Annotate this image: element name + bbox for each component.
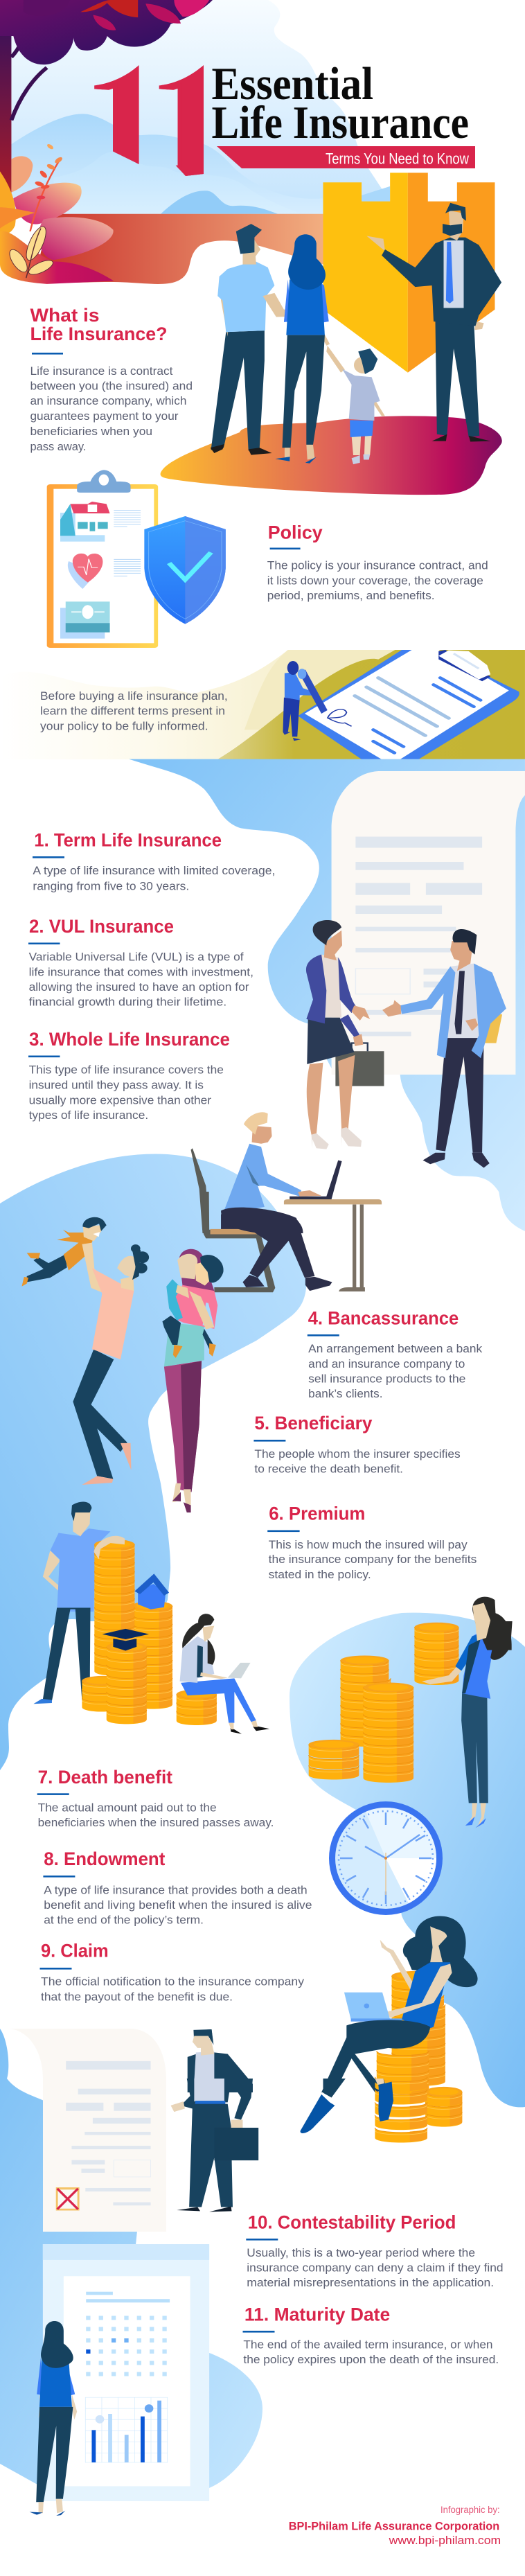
icon: heart [68, 554, 141, 589]
standing woman head [472, 1597, 512, 1650]
illustration: gradient hill [161, 416, 502, 495]
term 8: at the end of the policy’s term. [44, 1914, 204, 1927]
term 1: 1. Term Life Insurance [34, 829, 222, 850]
standing woman body [422, 1621, 513, 1828]
upper body and desk top [191, 1112, 382, 1233]
man legs and coin stacks [33, 1540, 269, 1734]
term 2: 2. VUL Insurance [29, 916, 174, 937]
text: what is life insurance: beneficiaries when you [30, 425, 152, 438]
term 9: that the payout of the benefit is due. [41, 1991, 233, 2003]
footer credits [289, 2504, 501, 2547]
term 9: 9. Claim [41, 1940, 109, 1961]
term 3: This type of life insurance covers the [29, 1064, 224, 1077]
illustration: businessman with briefcase [171, 2029, 258, 2212]
term 9: The official notification to the insurance company [41, 1976, 305, 1988]
illustration: family and insurance agent [211, 203, 501, 464]
title [94, 65, 475, 176]
lower part [301, 2077, 462, 2142]
illustration: document background [332, 771, 525, 1075]
illustration: claim document [10, 2029, 166, 2232]
term 7: beneficiaries when the insured passes away. [38, 1817, 274, 1829]
band background [0, 650, 525, 759]
term 11: 11. Maturity Date [244, 2304, 390, 2324]
term 4: bank’s clients. [308, 1388, 382, 1400]
subtitle ribbon [217, 146, 475, 168]
term 9 [40, 1940, 305, 2003]
legs, chair and desk legs [204, 1192, 365, 1292]
term 1: ranging from five to 30 years. [33, 880, 189, 892]
illustration: lower-left blue blob [0, 2029, 262, 2488]
term 4 [308, 1308, 483, 1400]
term 10: insurance company can deny a claim if they find [247, 2261, 504, 2274]
footer credits: BPI-Philam Life Assurance Corporation [289, 2521, 499, 2533]
term 2: financial growth during their lifetime. [29, 996, 226, 1009]
term 10: Usually, this is a two-year period where the [247, 2247, 475, 2259]
term 1 [33, 829, 275, 892]
footer credits: www.bpi-philam.com [389, 2534, 501, 2547]
illustration: handshake [306, 920, 506, 1167]
term 6: the insurance company for the benefits [269, 1553, 477, 1566]
term 4: sell insurance products to the [308, 1373, 465, 1385]
text: what is life insurance: between you (the insured) and [30, 380, 193, 392]
term 10: 10. Contestability Period [248, 2212, 456, 2233]
bar chart [85, 2397, 168, 2462]
icon: castle shield [323, 173, 495, 373]
term 8 [43, 1849, 312, 1927]
heading: policy: Policy [268, 522, 323, 543]
text: before buying: your policy to be fully informed. [40, 720, 208, 732]
hero ground [33, 214, 323, 284]
term 2 [28, 916, 253, 1009]
term 8: A type of life insurance that provides both a death [44, 1884, 308, 1896]
illustration: woman with coin stacks [309, 1597, 513, 1828]
term 7: The actual amount paid out to the [38, 1801, 217, 1814]
heading: what is life insurance: Life Insurance? [30, 324, 168, 344]
illustration: woman with laptop on coins [301, 1916, 478, 2142]
term 7: 7. Death benefit [38, 1767, 172, 1788]
term 3: types of life insurance. [29, 1109, 148, 1122]
text: policy: The policy is your insurance contract, and [267, 560, 488, 572]
flying child [21, 1217, 107, 1287]
panel: right lower blue blob [290, 1613, 525, 2107]
agent [366, 203, 501, 442]
title words: Life Insurance [212, 97, 469, 148]
icon: graduation cap [102, 1629, 149, 1651]
panel: right blue blob [129, 759, 525, 1231]
illustration: report document [43, 2244, 209, 2501]
term 6: 6. Premium [269, 1503, 365, 1524]
term 8: benefit and living benefit when the insured is alive [44, 1899, 312, 1912]
term 5: The people whom the insurer specifies [254, 1448, 461, 1461]
text: policy: it lists down your coverage, the coverage [267, 574, 483, 587]
term 5: to receive the death benefit. [254, 1463, 403, 1475]
illustration: person with pen [283, 661, 328, 741]
number 11: 11 [83, 30, 230, 212]
child [326, 346, 385, 464]
text: before buying: Before buying a life insurance plan, [40, 690, 228, 703]
icon: clock [329, 1801, 443, 1915]
term 2: allowing the insured to have an option for [29, 981, 249, 994]
illustration: woman viewing report [30, 2321, 77, 2516]
icon: contract clipboard [298, 650, 519, 759]
term 3: usually more expensive than other [29, 1095, 212, 1107]
illustration: tree and foliage [0, 0, 213, 284]
icon: money stack [60, 601, 110, 639]
calendar grid [86, 2316, 167, 2376]
text: what is life insurance: pass away. [30, 441, 86, 453]
businessman [382, 929, 506, 1167]
term 4: 4. Bancassurance [308, 1308, 459, 1329]
title words [212, 58, 469, 148]
term 3: insured until they pass away. It is [29, 1079, 204, 1091]
heading: what is life insurance: What is [30, 305, 100, 326]
term 1: A type of life insurance with limited coverage, [33, 865, 275, 877]
man upper body [43, 1501, 111, 1612]
text: what is life insurance: guarantees payment to your [30, 410, 179, 423]
term 11 [242, 2304, 499, 2366]
term 7 [37, 1767, 274, 1829]
seated woman with laptop [180, 1614, 269, 1734]
hero sky background [11, 0, 390, 214]
heading: what is life insurance [30, 305, 168, 355]
text: policy: period, premiums, and benefits. [267, 590, 435, 602]
text: what is life insurance: Life insurance is a contract [30, 365, 173, 378]
illustration: family [21, 1217, 224, 1512]
illustration: seated man at desk [191, 1112, 382, 1292]
term 4: and an insurance company to [308, 1358, 465, 1370]
term 6: This is how much the insured will pay [269, 1539, 468, 1551]
term 2: life insurance that comes with investment, [29, 966, 253, 978]
term 10: material misrepresentations in the application. [247, 2277, 494, 2289]
text: what is life insurance [30, 365, 193, 453]
clipboard board [47, 470, 158, 648]
text: policy [267, 560, 488, 602]
term 8: 8. Endowment [44, 1849, 165, 1869]
upper part [321, 1916, 478, 2094]
icon: house [60, 502, 141, 542]
panel: signing band [0, 650, 525, 759]
term 10 [246, 2212, 504, 2289]
term 6 [267, 1503, 477, 1581]
illustration: man with coin stacks and graduate [33, 1501, 269, 1734]
icon: check shield [144, 516, 226, 624]
coin stacks [309, 1623, 459, 1783]
mother and child [162, 1249, 224, 1512]
man in blue shirt [211, 224, 317, 455]
text: before buying [40, 690, 228, 732]
arm on coins and house icon [94, 1536, 169, 1609]
footer credits: Infographic by: [441, 2504, 500, 2515]
icon: red x box [56, 2187, 80, 2210]
title words: Essential [212, 58, 373, 109]
panel: left blue blob [0, 1154, 306, 1770]
father [73, 1243, 149, 1485]
subtitle ribbon: Terms You Need to Know [326, 150, 469, 168]
woman in blue [275, 234, 330, 464]
term 2: Variable Universal Life (VUL) is a type of [29, 951, 244, 964]
text: before buying: learn the different terms present in [40, 705, 225, 718]
term 4: An arrangement between a bank [308, 1343, 483, 1355]
term 3 [28, 1029, 230, 1122]
term 11: the policy expires upon the death of the insured. [243, 2354, 499, 2366]
term 3: 3. Whole Life Insurance [29, 1029, 230, 1050]
term 5 [253, 1413, 461, 1475]
term 5: 5. Beneficiary [254, 1413, 372, 1433]
illustration: policy clipboard [47, 470, 226, 648]
businesswoman [306, 920, 384, 1149]
term 11: The end of the availed term insurance, or when [243, 2339, 493, 2352]
text: what is life insurance: an insurance company, which [30, 395, 187, 407]
term 6: stated in the policy. [269, 1569, 371, 1581]
